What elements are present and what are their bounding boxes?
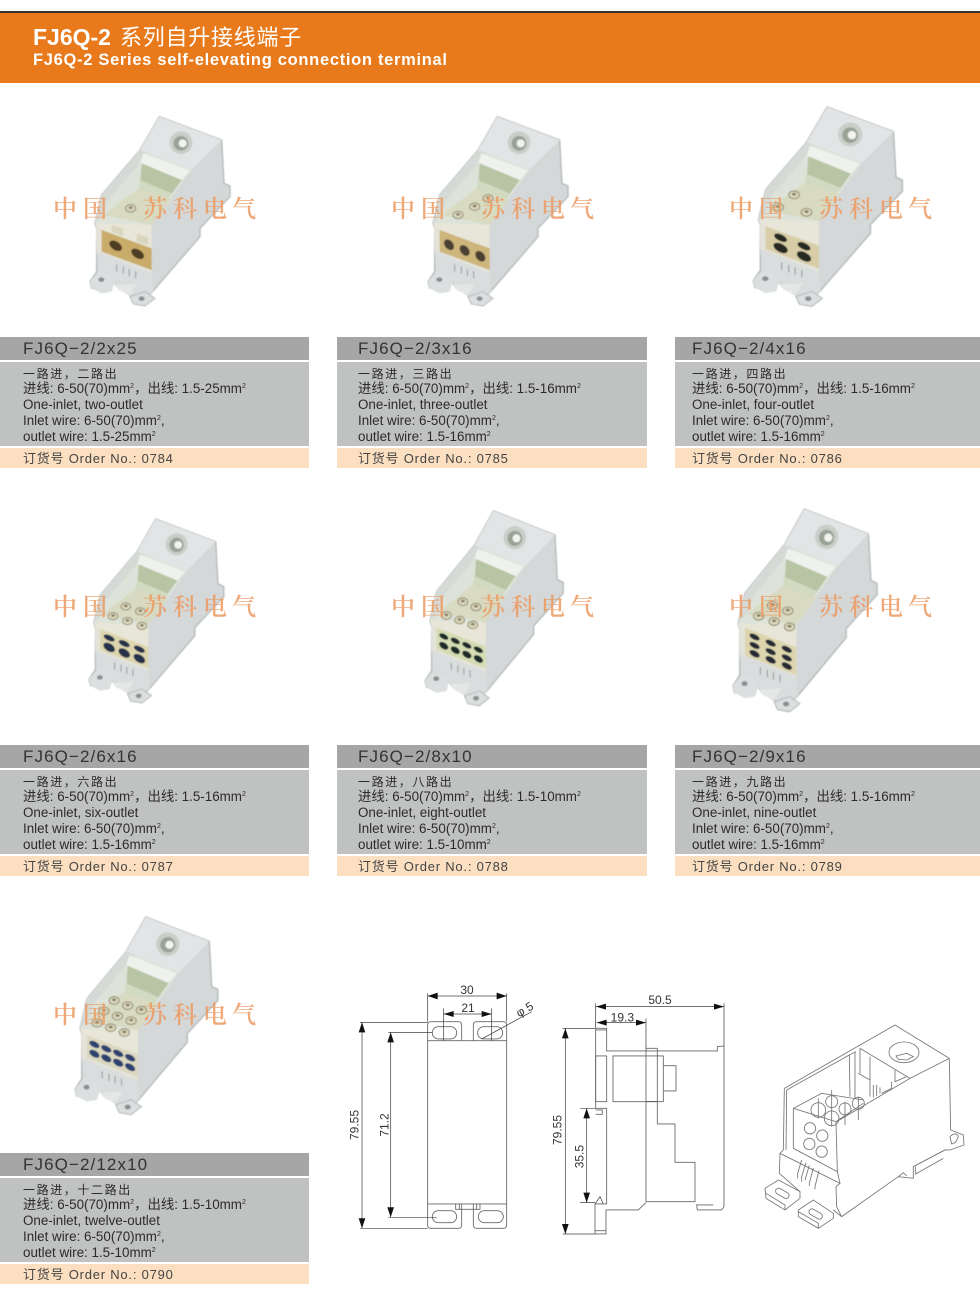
specification text: 2	[152, 431, 156, 438]
specification text: 2	[911, 383, 915, 390]
specification text: 一路进，九路出	[692, 774, 787, 789]
specification text: Inlet wire: 6-50(70)mm	[23, 1229, 165, 1244]
specification text: outlet wire: 1.5-10mm	[358, 837, 491, 852]
specification text: 2	[577, 383, 581, 390]
specification text: outlet wire: 1.5-16mm	[692, 429, 825, 444]
specification text: ,	[830, 821, 834, 836]
specification text: 一路进，二路出	[23, 366, 118, 381]
specification text: 进线: 6-50(70)mm	[692, 381, 915, 396]
isometric line drawing	[765, 1025, 964, 1228]
watermark: 中国苏科电气	[391, 189, 594, 224]
order number: 订货号 Order No.: 0786	[692, 451, 843, 466]
panel: FJ6Q-2/3x16 spec	[337, 337, 647, 468]
dimension drawing: side view: 35.5	[573, 1145, 587, 1168]
specification text: One-inlet, eight-outlet	[358, 805, 486, 820]
specification text: ，出线: 1.5-25mm	[134, 381, 242, 396]
order number: 订货号 Order No.: 0788	[358, 859, 509, 874]
specification text: ，出线: 1.5-16mm	[134, 789, 242, 804]
dimension drawing: side view: 19.3	[611, 1010, 634, 1024]
order number: 订货号 Order No.: 0790	[23, 1267, 174, 1282]
header banner	[0, 11, 980, 83]
panel: FJ6Q-2/8x10 spec	[337, 745, 647, 876]
specification text: 进线: 6-50(70)mm	[23, 1197, 246, 1212]
specification text: ,	[496, 413, 500, 428]
product photo: FJ6Q-2/6x16	[89, 519, 224, 703]
specification text: Inlet wire: 6-50(70)mm	[692, 413, 834, 428]
specification text: 2	[465, 383, 469, 390]
specification text: 2	[152, 1247, 156, 1254]
specification text: 2	[152, 839, 156, 846]
specification text: 一路进，三路出	[358, 366, 453, 381]
specification text: ,	[496, 821, 500, 836]
title: Chinese: FJ6Q-2	[33, 24, 111, 50]
specification text: ，出线: 1.5-10mm	[469, 789, 577, 804]
product photo: FJ6Q-2/2x25	[90, 117, 230, 306]
dimension drawing: front view: 71.2	[377, 1113, 391, 1137]
order number: 订货号 Order No.: 0787	[23, 859, 174, 874]
specification text: Inlet wire: 6-50(70)mm	[358, 821, 500, 836]
specification text: One-inlet, two-outlet	[23, 397, 143, 412]
dimension drawing: front view: 21	[461, 1001, 475, 1015]
specification text: 2	[799, 383, 803, 390]
panel: FJ6Q-2/6x16 spec	[0, 745, 309, 876]
specification text: outlet wire: 1.5-16mm	[23, 837, 156, 852]
specification text: 2	[157, 415, 161, 422]
specification text: 2	[826, 415, 830, 422]
watermark: 中国苏科电气	[391, 587, 594, 622]
specification text: outlet wire: 1.5-16mm	[692, 837, 825, 852]
specification text: ,	[161, 821, 165, 836]
specification text: 2	[577, 791, 581, 798]
specification text: ，出线: 1.5-16mm	[803, 789, 911, 804]
specification text: ,	[830, 413, 834, 428]
specification text: 2	[465, 791, 469, 798]
specification text: outlet wire: 1.5-25mm	[23, 429, 156, 444]
panel: FJ6Q-2/12x10 spec	[0, 1153, 309, 1284]
model name: FJ6Q−2/6x16	[23, 747, 138, 766]
model name: FJ6Q−2/8x10	[358, 747, 473, 766]
series name in Chinese: 系列自升接线端子	[120, 25, 302, 50]
watermark: 中国苏科电气	[729, 587, 932, 622]
specification text: 2	[242, 383, 246, 390]
specification text: 2	[821, 839, 825, 846]
specification text: 2	[821, 431, 825, 438]
specification text: 一路进，六路出	[23, 774, 118, 789]
specification text: ,	[161, 413, 165, 428]
model name: FJ6Q−2/3x16	[358, 339, 473, 358]
specification text: 一路进，十二路出	[23, 1182, 132, 1197]
specification text: ，出线: 1.5-16mm	[803, 381, 911, 396]
specification text: One-inlet, nine-outlet	[692, 805, 817, 820]
specification text: 2	[492, 415, 496, 422]
product photo: FJ6Q-2/9x16	[733, 509, 877, 712]
model name: FJ6Q−2/4x16	[692, 339, 807, 358]
specification text: 2	[487, 839, 491, 846]
specification text: 2	[492, 823, 496, 830]
dimension drawing: front view	[347, 983, 536, 1228]
specification text: 2	[130, 1199, 134, 1206]
specification text: 2	[911, 791, 915, 798]
dimension drawing: front view: 79.55	[347, 1110, 361, 1140]
specification text: 2	[157, 823, 161, 830]
watermark: 中国苏科电气	[53, 995, 256, 1030]
watermark: 中国苏科电气	[53, 189, 256, 224]
specification text: One-inlet, twelve-outlet	[23, 1213, 160, 1228]
specification text: Inlet wire: 6-50(70)mm	[23, 821, 165, 836]
specification text: 2	[242, 1199, 246, 1206]
product photo: FJ6Q-2/8x10	[425, 511, 563, 706]
order number: 订货号 Order No.: 0785	[358, 451, 509, 466]
specification text: 2	[799, 791, 803, 798]
specification text: 进线: 6-50(70)mm	[692, 789, 915, 804]
specification text: 2	[130, 383, 134, 390]
specification text: One-inlet, four-outlet	[692, 397, 814, 412]
watermark: 中国苏科电气	[729, 189, 932, 224]
specification text: 2	[487, 431, 491, 438]
product photo: FJ6Q-2/3x16	[428, 117, 568, 306]
model name: FJ6Q−2/9x16	[692, 747, 807, 766]
model name: FJ6Q−2/2x25	[23, 339, 138, 358]
specification text: ，出线: 1.5-10mm	[134, 1197, 242, 1212]
specification text: 进线: 6-50(70)mm	[358, 789, 581, 804]
panel: FJ6Q-2/4x16 spec	[675, 337, 980, 468]
specification text: outlet wire: 1.5-16mm	[358, 429, 491, 444]
specification text: 2	[157, 1231, 161, 1238]
dimension drawing: side view: 50.5	[648, 993, 672, 1007]
dimension drawing: side view	[551, 993, 724, 1234]
model name: FJ6Q−2/12x10	[23, 1155, 148, 1174]
dimension drawing: side view: 79.55	[551, 1115, 565, 1145]
specification text: One-inlet, six-outlet	[23, 805, 139, 820]
panel: FJ6Q-2/2x25 spec	[0, 337, 309, 468]
specification text: Inlet wire: 6-50(70)mm	[23, 413, 165, 428]
specification text: 进线: 6-50(70)mm	[23, 789, 246, 804]
specification text: 一路进，四路出	[692, 366, 787, 381]
specification text: 一路进，八路出	[358, 774, 453, 789]
title: English: FJ6Q-2 Series self-elevating connection terminal	[33, 51, 447, 69]
specification text: Inlet wire: 6-50(70)mm	[358, 413, 500, 428]
specification text: 2	[130, 791, 134, 798]
dimension drawing: front view: φ 5	[513, 999, 536, 1020]
dimension drawing: front view: 30	[460, 983, 474, 997]
watermark: 中国苏科电气	[53, 587, 256, 622]
product photo: FJ6Q-2/12x10	[75, 917, 218, 1115]
specification text: Inlet wire: 6-50(70)mm	[692, 821, 834, 836]
order number: 订货号 Order No.: 0784	[23, 451, 174, 466]
specification text: ,	[161, 1229, 165, 1244]
specification text: 进线: 6-50(70)mm	[23, 381, 246, 396]
specification text: outlet wire: 1.5-10mm	[23, 1245, 156, 1260]
specification text: 2	[242, 791, 246, 798]
order number: 订货号 Order No.: 0789	[692, 859, 843, 874]
specification text: ，出线: 1.5-16mm	[469, 381, 577, 396]
product photo: FJ6Q-2/4x16	[753, 107, 902, 306]
specification text: 2	[826, 823, 830, 830]
specification text: One-inlet, three-outlet	[358, 397, 488, 412]
specification text: 进线: 6-50(70)mm	[358, 381, 581, 396]
panel: FJ6Q-2/9x16 spec	[675, 745, 980, 876]
